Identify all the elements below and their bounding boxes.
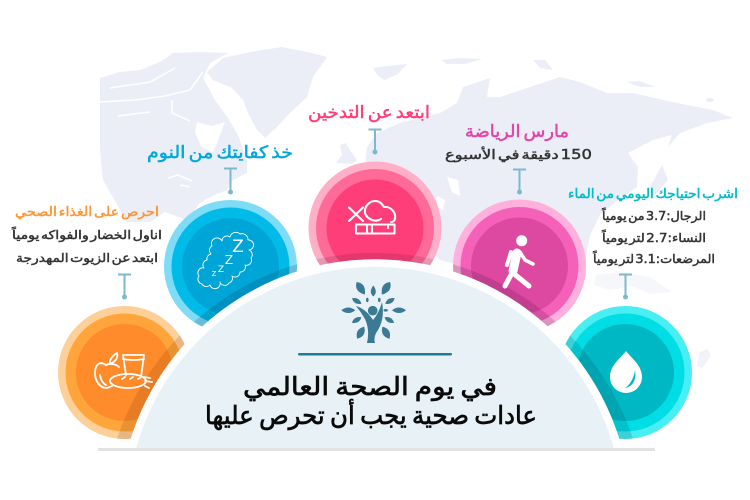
- icon: sleep cloud: Z: [225, 253, 233, 267]
- icon: walking person: [505, 235, 533, 286]
- title: [205, 372, 537, 431]
- connector: exercise: [513, 170, 526, 194]
- icon: tree with person: [341, 280, 406, 343]
- divider: [298, 353, 452, 356]
- icon: sleep cloud: Z: [232, 237, 244, 257]
- text: water: المرضعات:3.1 لتر يومياً: [593, 250, 715, 267]
- panel: sleep circle: [164, 200, 297, 326]
- panel: smoking circle: [308, 162, 442, 266]
- text: smoking: ابتعد عن التدخين: [308, 103, 430, 123]
- icon: food: [95, 353, 152, 388]
- text: exercise: [445, 122, 592, 163]
- ground shadow: [98, 448, 655, 451]
- panel: exercise circle: [453, 200, 586, 326]
- icon: no smoking: [349, 201, 395, 234]
- text: food: [12, 205, 162, 266]
- panel: water circle: [565, 306, 692, 439]
- connector: water: [619, 274, 632, 300]
- text: water: اشرب احتياجك اليومي من الماء: [568, 187, 738, 202]
- icon: water drop: [610, 351, 642, 393]
- text: food: ابتعد عن الزيوت المهدرجة: [16, 251, 158, 266]
- connector: food: [118, 274, 131, 300]
- text: water: الرجال:3.7 من يومياً: [602, 207, 706, 224]
- title: في يوم الصحة العالمي: [243, 372, 497, 401]
- text: food: اناول الخضار والفواكه يومياً: [12, 226, 162, 243]
- connector: smoking: [368, 130, 382, 154]
- text: food: احرص على الغذاء الصحي: [15, 205, 159, 220]
- text: water: [568, 187, 738, 267]
- text: exercise: مارس الرياضة: [465, 122, 569, 142]
- world map background: [100, 47, 733, 368]
- text: sleep: خذ كفايتك من النوم: [147, 143, 293, 163]
- text: exercise: 150 دقيقة في الأسبوع: [445, 146, 592, 163]
- text: water: النساء:2.7 لتر يومياً: [602, 229, 706, 246]
- title: عادات صحية يجب أن تحرص عليها: [205, 398, 537, 431]
- icon: sleep cloud: Z: [218, 265, 224, 275]
- icon: sleep cloud: Z: [212, 270, 217, 278]
- icon: sleep cloud: [198, 232, 254, 289]
- panel: food circle: [58, 306, 184, 439]
- central dome: [128, 259, 622, 448]
- connector: sleep: [224, 168, 237, 194]
